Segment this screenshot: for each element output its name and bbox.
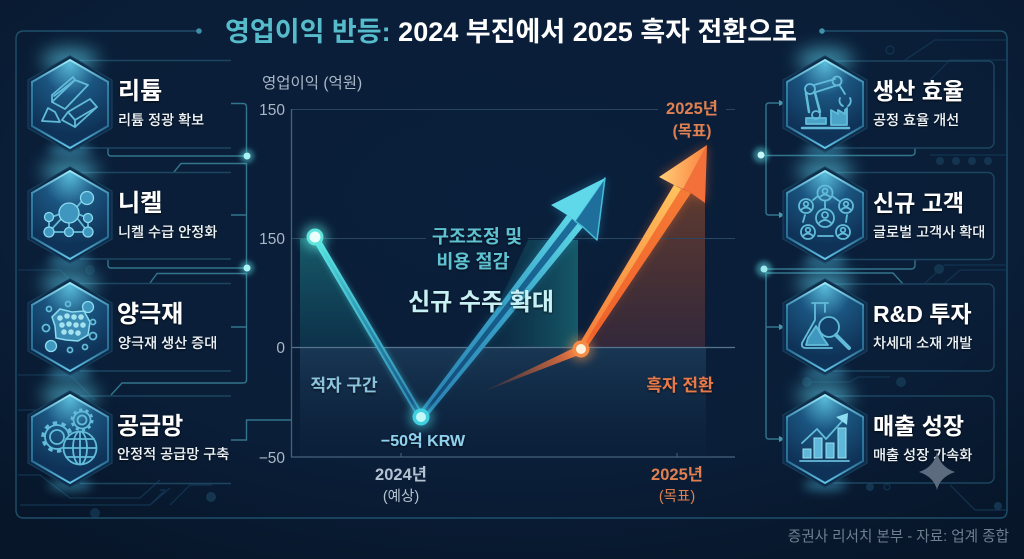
sublabel: 양극재 생산 증대: 양극재 생산 증대	[118, 336, 217, 352]
panel: 니켈	[28, 159, 231, 267]
icon: sparkle	[919, 452, 955, 490]
label: 리튬: 리튬	[118, 78, 162, 105]
hexagon badge	[783, 56, 867, 152]
hexagon badge	[783, 279, 867, 375]
point: breakeven	[569, 337, 593, 361]
label: 2024 axis: (예상)	[383, 488, 419, 505]
y axis title: 영업이익 (억원)	[262, 74, 362, 92]
label: 2025 target top: (목표)	[673, 123, 711, 140]
hexagon badge	[28, 279, 112, 375]
footer source: 증권사 리서치 본부 - 자료: 업계 종합	[788, 528, 1009, 545]
area: right teal	[478, 240, 578, 347]
icon: nickel molecule	[44, 192, 94, 237]
area: left teal	[300, 238, 380, 347]
label: 매출 성장: 매출 성장	[873, 413, 964, 439]
label: 2025 axis: (목표)	[659, 489, 695, 505]
label: 양극재: 양극재	[117, 301, 183, 328]
connectors: right side	[753, 100, 915, 442]
hexagon badge	[28, 391, 112, 487]
y axis labels: 0	[276, 340, 285, 357]
hexagon badge	[783, 391, 867, 487]
y axis labels: −50	[259, 450, 285, 467]
label: low value: −50억 KRW	[381, 432, 466, 450]
hexagon badge	[28, 56, 112, 152]
label: loss zone: 적자 구간	[310, 376, 378, 395]
panel: 생산 효율	[783, 48, 994, 156]
panel: R&D 투자	[783, 271, 994, 379]
icon: metal ingots	[42, 77, 97, 127]
sublabel: 니켈 수급 안정화: 니켈 수급 안정화	[118, 225, 217, 241]
label: 공급망: 공급망	[117, 413, 183, 440]
sublabel: 리튬 정광 확보: 리튬 정광 확보	[118, 113, 204, 129]
label: 생산 효율: 생산 효율	[873, 78, 964, 104]
label: profit turnaround: 흑자 전환	[646, 376, 714, 395]
label: 니켈: 니켈	[118, 190, 162, 217]
panel: 신규 고객	[783, 159, 994, 267]
icon: flask and magnifier	[802, 303, 849, 348]
point: 2024 start	[302, 224, 328, 250]
panel: 양극재	[28, 271, 231, 379]
arrow: orange growth	[480, 145, 707, 393]
y axis labels	[259, 102, 285, 467]
line: decline	[315, 237, 421, 417]
sublabel: 안정적 공급망 구축: 안정적 공급망 구축	[117, 447, 229, 463]
title: 영업이익 반등: 2024 부진에서 2025 흑자 전환으로	[225, 17, 797, 47]
icon: cathode particles	[42, 302, 96, 352]
chart: operating profit	[259, 74, 735, 505]
callout: cost cutting: 비용 절감	[436, 251, 510, 272]
hexagon badge	[783, 167, 867, 263]
grid and axes	[291, 109, 735, 457]
callout: cost cutting	[432, 226, 522, 272]
label: 2025 target top	[666, 99, 718, 140]
icon: growth chart	[800, 413, 849, 461]
panel: 리튬	[28, 48, 231, 156]
icon: gears and globe	[43, 410, 96, 464]
y axis labels: 150	[259, 231, 285, 248]
icon: robot arm and factory	[802, 76, 851, 128]
label: 2024 axis	[375, 465, 427, 505]
callout: new orders: 신규 수주 확대	[408, 289, 554, 316]
label: R&D 투자: R&D 투자	[873, 301, 972, 327]
sublabel: 글로벌 고객사 확대: 글로벌 고객사 확대	[873, 225, 985, 241]
point: low	[409, 405, 433, 429]
sublabel: 공정 효율 개선: 공정 효율 개선	[873, 113, 959, 129]
area: loss zone	[300, 347, 706, 457]
label: 2024 axis: 2024년	[375, 465, 427, 484]
callout: cost cutting: 구조조정 및	[432, 226, 522, 247]
area: orange	[581, 190, 705, 347]
icon: customer network	[799, 186, 853, 239]
connectors: left side	[108, 104, 291, 440]
panel: 매출 성장	[783, 383, 994, 491]
label: 2025 axis	[651, 465, 703, 505]
arrow: blue recovery	[418, 178, 605, 420]
label: 2025 target top: 2025년	[666, 99, 718, 118]
y axis labels: 150	[259, 102, 285, 119]
sublabel: 매출 성장 가속화: 매출 성장 가속화	[873, 448, 972, 464]
label: 신규 고객: 신규 고객	[873, 190, 964, 216]
hexagon badge	[28, 167, 112, 263]
label: 2025 axis: 2025년	[651, 465, 703, 484]
panel: 공급망	[28, 383, 231, 491]
sublabel: 차세대 소재 개발: 차세대 소재 개발	[873, 336, 972, 352]
